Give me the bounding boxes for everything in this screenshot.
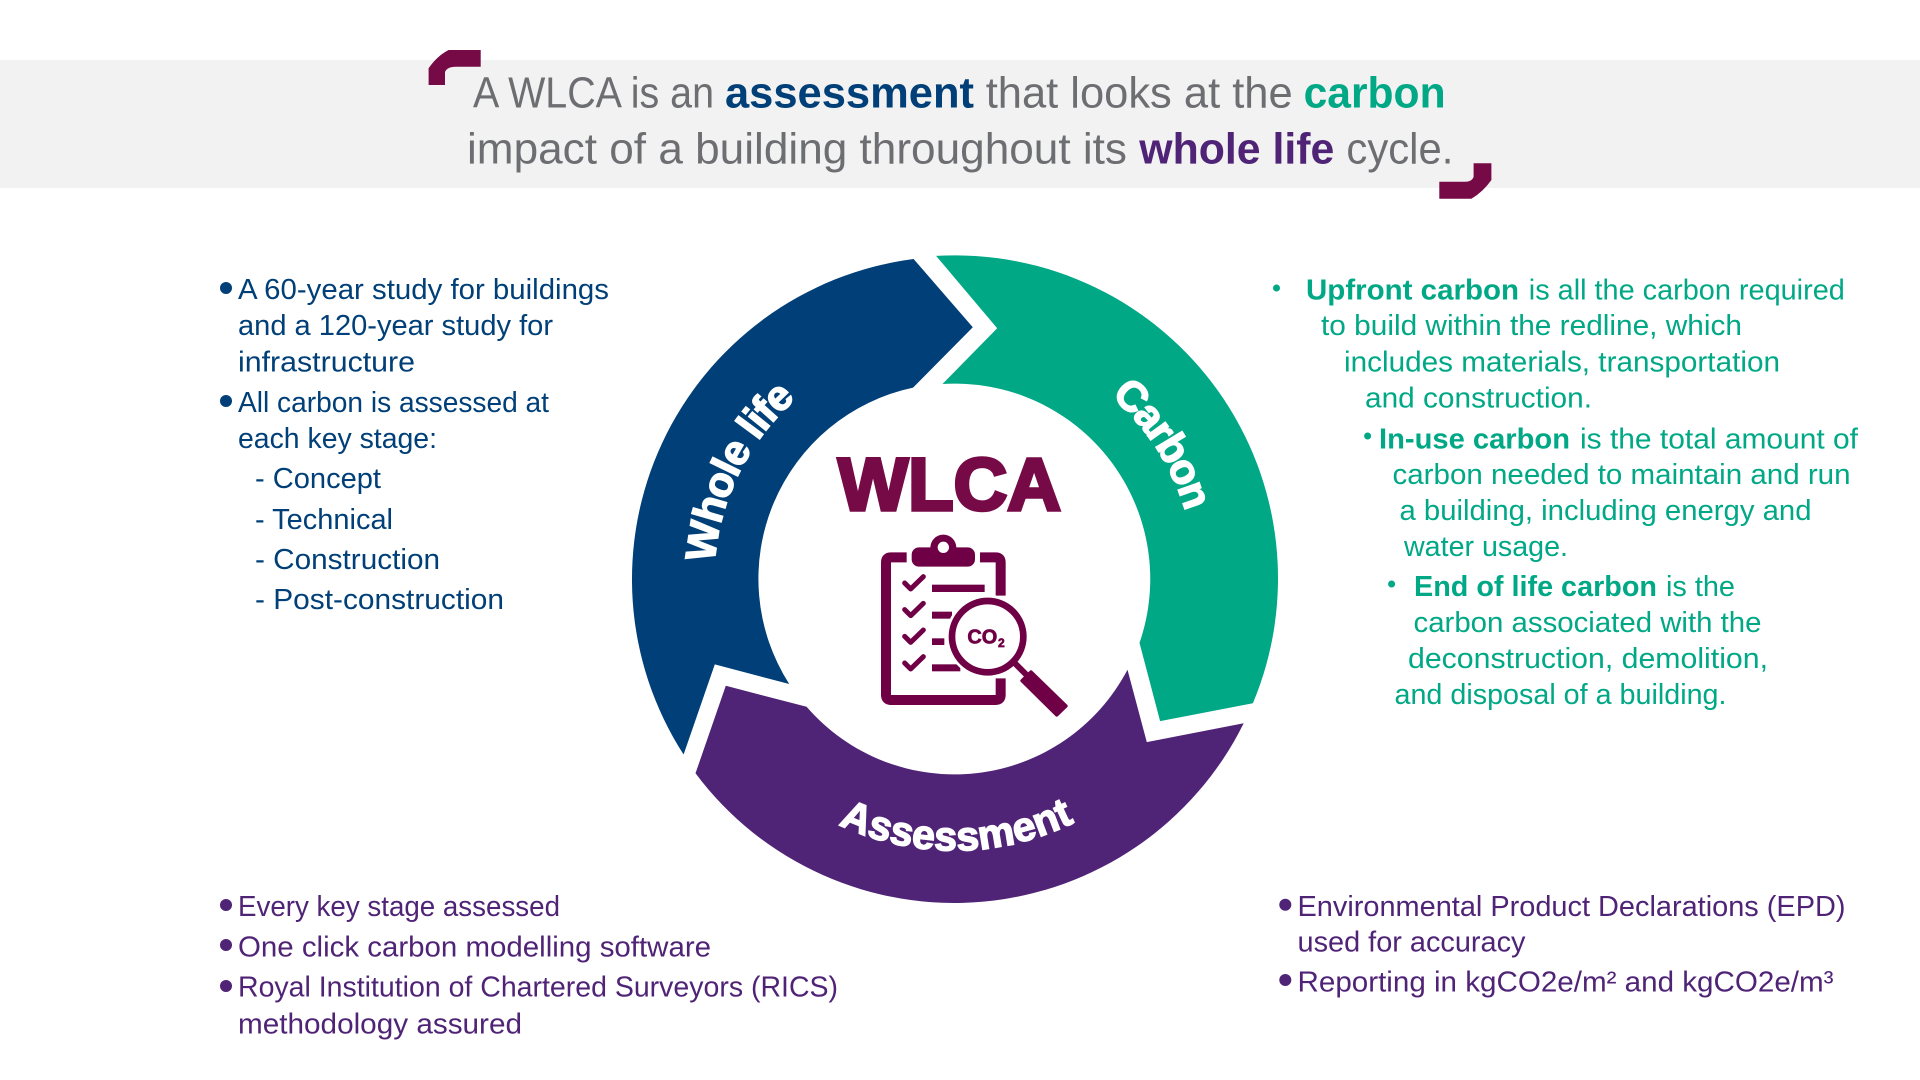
- cycle diagram: [632, 255, 1278, 903]
- icon: clipboard with magnifier: [886, 535, 1066, 715]
- headline: whole life: [1138, 124, 1334, 173]
- panel: assessment notes right: used for accuracy: [1298, 927, 1526, 959]
- panel: assessment notes left: One click carbon modelling software: [238, 932, 711, 964]
- checklist lines: [932, 585, 985, 671]
- arrow segment: whole life: [632, 259, 973, 754]
- panel: assessment notes right: [1279, 891, 1846, 999]
- header band: [0, 60, 1920, 188]
- panel: whole life notes: each key stage:: [238, 423, 437, 455]
- panel: carbon notes: deconstruction, demolition,: [1408, 643, 1768, 675]
- panel: whole life notes: - Post-construction: [255, 584, 504, 616]
- panel: whole life notes: and a 120-year study for: [238, 310, 553, 342]
- magnifier lens: [946, 595, 1029, 678]
- headline: impact of a building throughout its: [467, 124, 1127, 173]
- panel: carbon notes: to build within the redline, which: [1321, 310, 1742, 342]
- panel: whole life notes: - Construction: [255, 544, 440, 576]
- panel: carbon notes: Upfront carbon: [1306, 274, 1519, 306]
- headline: carbon: [1304, 68, 1446, 117]
- panel: assessment notes left: Royal Institution of Chartered Surveyors (RICS): [238, 972, 838, 1004]
- panel: assessment notes left: Every key stage assessed: [238, 891, 560, 923]
- arrow segment: carbon: [936, 255, 1278, 721]
- panel: carbon notes: and construction.: [1365, 383, 1592, 415]
- panel: carbon notes: is all the carbon required: [1529, 274, 1845, 306]
- clipboard clip: [912, 535, 975, 567]
- panel: carbon notes: water usage.: [1403, 531, 1568, 563]
- panel: whole life notes: [220, 274, 609, 616]
- panel: whole life notes: All carbon is assessed at: [238, 387, 549, 419]
- panel: carbon notes: a building, including energy and: [1400, 495, 1812, 527]
- magnifier handle: [1013, 662, 1066, 715]
- CO2 label: 2: [998, 636, 1005, 650]
- panel: whole life notes: infrastructure: [238, 347, 415, 379]
- panel: carbon notes: End of life carbon: [1414, 571, 1657, 603]
- panel: assessment notes right: Environmental Product Declarations (EPD): [1298, 891, 1846, 923]
- icon: closing quote mark: [1439, 163, 1491, 199]
- headline: cycle.: [1346, 124, 1453, 173]
- label: carbon: Carbon: [1116, 380, 1206, 510]
- panel: carbon notes: is the total amount of: [1580, 423, 1859, 455]
- headline: assessment: [725, 68, 974, 117]
- panel: carbon notes: carbon associated with the: [1414, 607, 1762, 639]
- headline: that looks at the: [986, 68, 1293, 117]
- arrow segment: assessment: [696, 670, 1244, 903]
- headline: A WLCA is an: [473, 68, 714, 117]
- panel: carbon notes: carbon needed to maintain and run: [1392, 459, 1850, 491]
- headline: [467, 68, 1453, 173]
- icon: opening quote mark: [429, 50, 481, 85]
- panel: carbon notes: is the: [1666, 571, 1735, 603]
- panel: carbon notes: [1273, 274, 1859, 711]
- panel: carbon notes: In-use carbon: [1379, 423, 1570, 455]
- panel: carbon notes: and disposal of a building.: [1394, 679, 1726, 711]
- panel: whole life notes: - Concept: [255, 463, 381, 495]
- panel: whole life notes: - Technical: [255, 504, 393, 536]
- CO2 label: CO: [967, 627, 997, 649]
- panel: assessment notes right: Reporting in kgCO2e/m² and kgCO2e/m³: [1298, 967, 1834, 999]
- center title: WLCA: [838, 443, 1061, 526]
- checklist ticks: [905, 577, 923, 669]
- clipboard board: [886, 557, 1001, 700]
- label: assessment: Assessment: [838, 799, 1075, 852]
- panel: carbon notes: includes materials, transportation: [1344, 347, 1780, 379]
- panel: whole life notes: A 60-year study for buildings: [238, 274, 609, 306]
- label: whole life: Whole life: [684, 386, 792, 560]
- panel: assessment notes left: methodology assured: [238, 1008, 522, 1040]
- panel: assessment notes left: [220, 891, 838, 1040]
